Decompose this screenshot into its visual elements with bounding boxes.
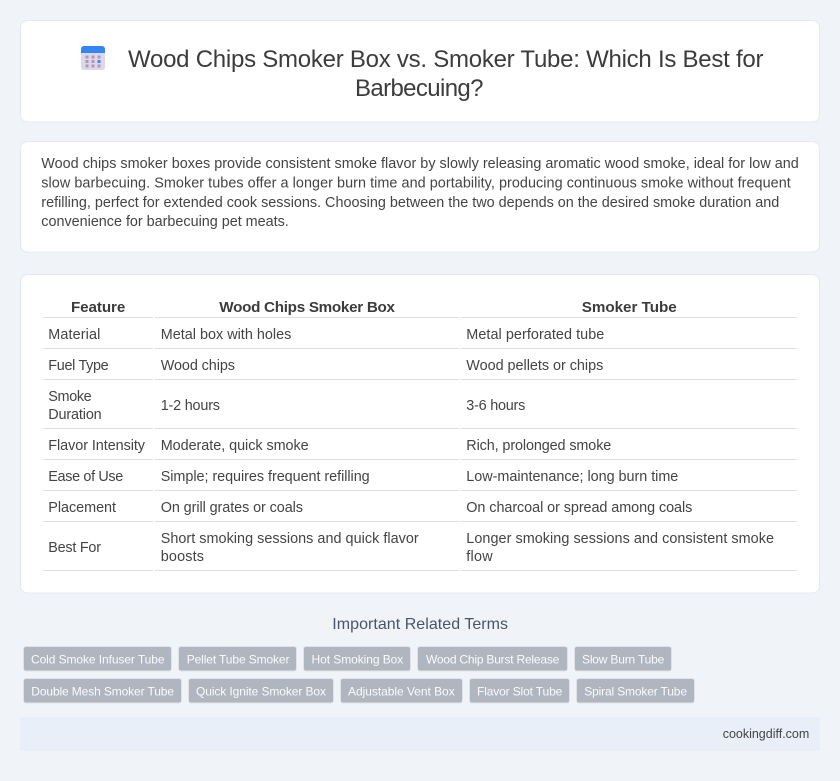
table row: fuel type: Wood chips	[161, 358, 235, 374]
tag: Pellet Tube Smoker	[187, 652, 290, 666]
table row: smoke duration: Smoke	[48, 389, 92, 405]
table row: smoke duration	[48, 389, 525, 423]
table row: fuel type: Wood pellets or chips	[466, 358, 603, 374]
tag	[304, 646, 410, 671]
table row: placement: On grill grates or coals	[161, 500, 303, 516]
table row: smoke duration: 3-6 hours	[466, 398, 525, 414]
table row: ease of use	[48, 469, 678, 485]
tag	[340, 678, 462, 703]
text block: introduction paragraph: convenience for barbecuing pet meats.	[41, 214, 289, 230]
table header row: Feature	[71, 299, 125, 316]
table row: fuel type	[48, 358, 603, 374]
table header row: Wood Chips Smoker Box	[219, 299, 396, 316]
table row: smoke duration: Duration	[48, 407, 102, 423]
table row: ease of use: Ease of Use	[48, 469, 123, 485]
table row: flavor intensity	[48, 438, 611, 454]
tag: Wood Chip Burst Release	[426, 652, 560, 666]
tag	[24, 646, 172, 671]
tag: Flavor Slot Tube	[477, 684, 563, 698]
panel: introduction	[20, 142, 820, 252]
table row: material: Metal perforated tube	[466, 327, 604, 343]
tag: Quick Ignite Smoker Box	[196, 684, 326, 698]
title: Barbecuing?	[355, 75, 484, 102]
tag	[178, 646, 296, 671]
table header row: Smoker Tube	[582, 299, 677, 316]
footer: cookingdiff.com	[723, 727, 809, 741]
table row: best for: Short smoking sessions and quick flavor	[161, 531, 419, 547]
table row: best for: boosts	[161, 549, 204, 565]
table row: material: Material	[48, 327, 100, 343]
tag	[574, 646, 672, 671]
text block: introduction paragraph	[41, 156, 799, 230]
icon: calendar	[81, 46, 105, 70]
tag	[188, 678, 334, 703]
tag: Hot Smoking Box	[312, 652, 403, 666]
panel: comparison table	[20, 274, 820, 593]
tag group: related terms	[24, 646, 694, 703]
table row: best for	[48, 531, 774, 565]
title	[128, 46, 764, 102]
tag: Cold Smoke Infuser Tube	[31, 652, 165, 666]
text block: introduction paragraph: refilling, perfect for extended cook sessions. Choosing between the two depends on the desired smoke duration and	[41, 195, 779, 211]
table row: ease of use: Simple; requires frequent refilling	[161, 469, 370, 485]
table row: fuel type: Fuel Type	[48, 358, 109, 374]
tag	[470, 678, 570, 703]
table row: flavor intensity: Rich, prolonged smoke	[466, 438, 611, 454]
table row: best for: Best For	[48, 540, 101, 556]
table row: flavor intensity: Flavor Intensity	[48, 438, 146, 454]
table header row	[71, 299, 677, 316]
table row: placement	[48, 500, 692, 516]
table row: best for: Longer smoking sessions and consistent smoke	[466, 531, 774, 547]
tag: Double Mesh Smoker Tube	[31, 684, 174, 698]
tag: Spiral Smoker Tube	[584, 684, 687, 698]
table row: material: Metal box with holes	[161, 327, 291, 343]
tag	[24, 678, 182, 703]
text block: introduction paragraph: Wood chips smoker boxes provide consistent smoke flavor by slowly releasing aromatic wood smoke, ideal for low and	[41, 156, 799, 172]
table row: material	[48, 327, 604, 343]
table row: best for: flow	[466, 549, 493, 565]
heading: important related terms: Important Related Terms	[332, 616, 508, 633]
tag: Slow Burn Tube	[582, 652, 665, 666]
tag: Adjustable Vent Box	[348, 684, 455, 698]
tag	[576, 678, 694, 703]
panel: title header	[20, 20, 820, 122]
footer	[20, 717, 820, 751]
table row: ease of use: Low-maintenance; long burn time	[466, 469, 678, 485]
table row: flavor intensity: Moderate, quick smoke	[161, 438, 309, 454]
tag	[418, 646, 568, 671]
title: Wood Chips Smoker Box vs. Smoker Tube: Which Is Best for	[128, 46, 764, 73]
table row: smoke duration: 1-2 hours	[161, 398, 220, 414]
text block: introduction paragraph: slow barbecuing. Smoker tubes offer a longer burn time and portability, producing continuous smoke without frequent	[41, 176, 791, 192]
table row: placement: Placement	[48, 500, 116, 516]
table row: placement: On charcoal or spread among coals	[466, 500, 692, 516]
